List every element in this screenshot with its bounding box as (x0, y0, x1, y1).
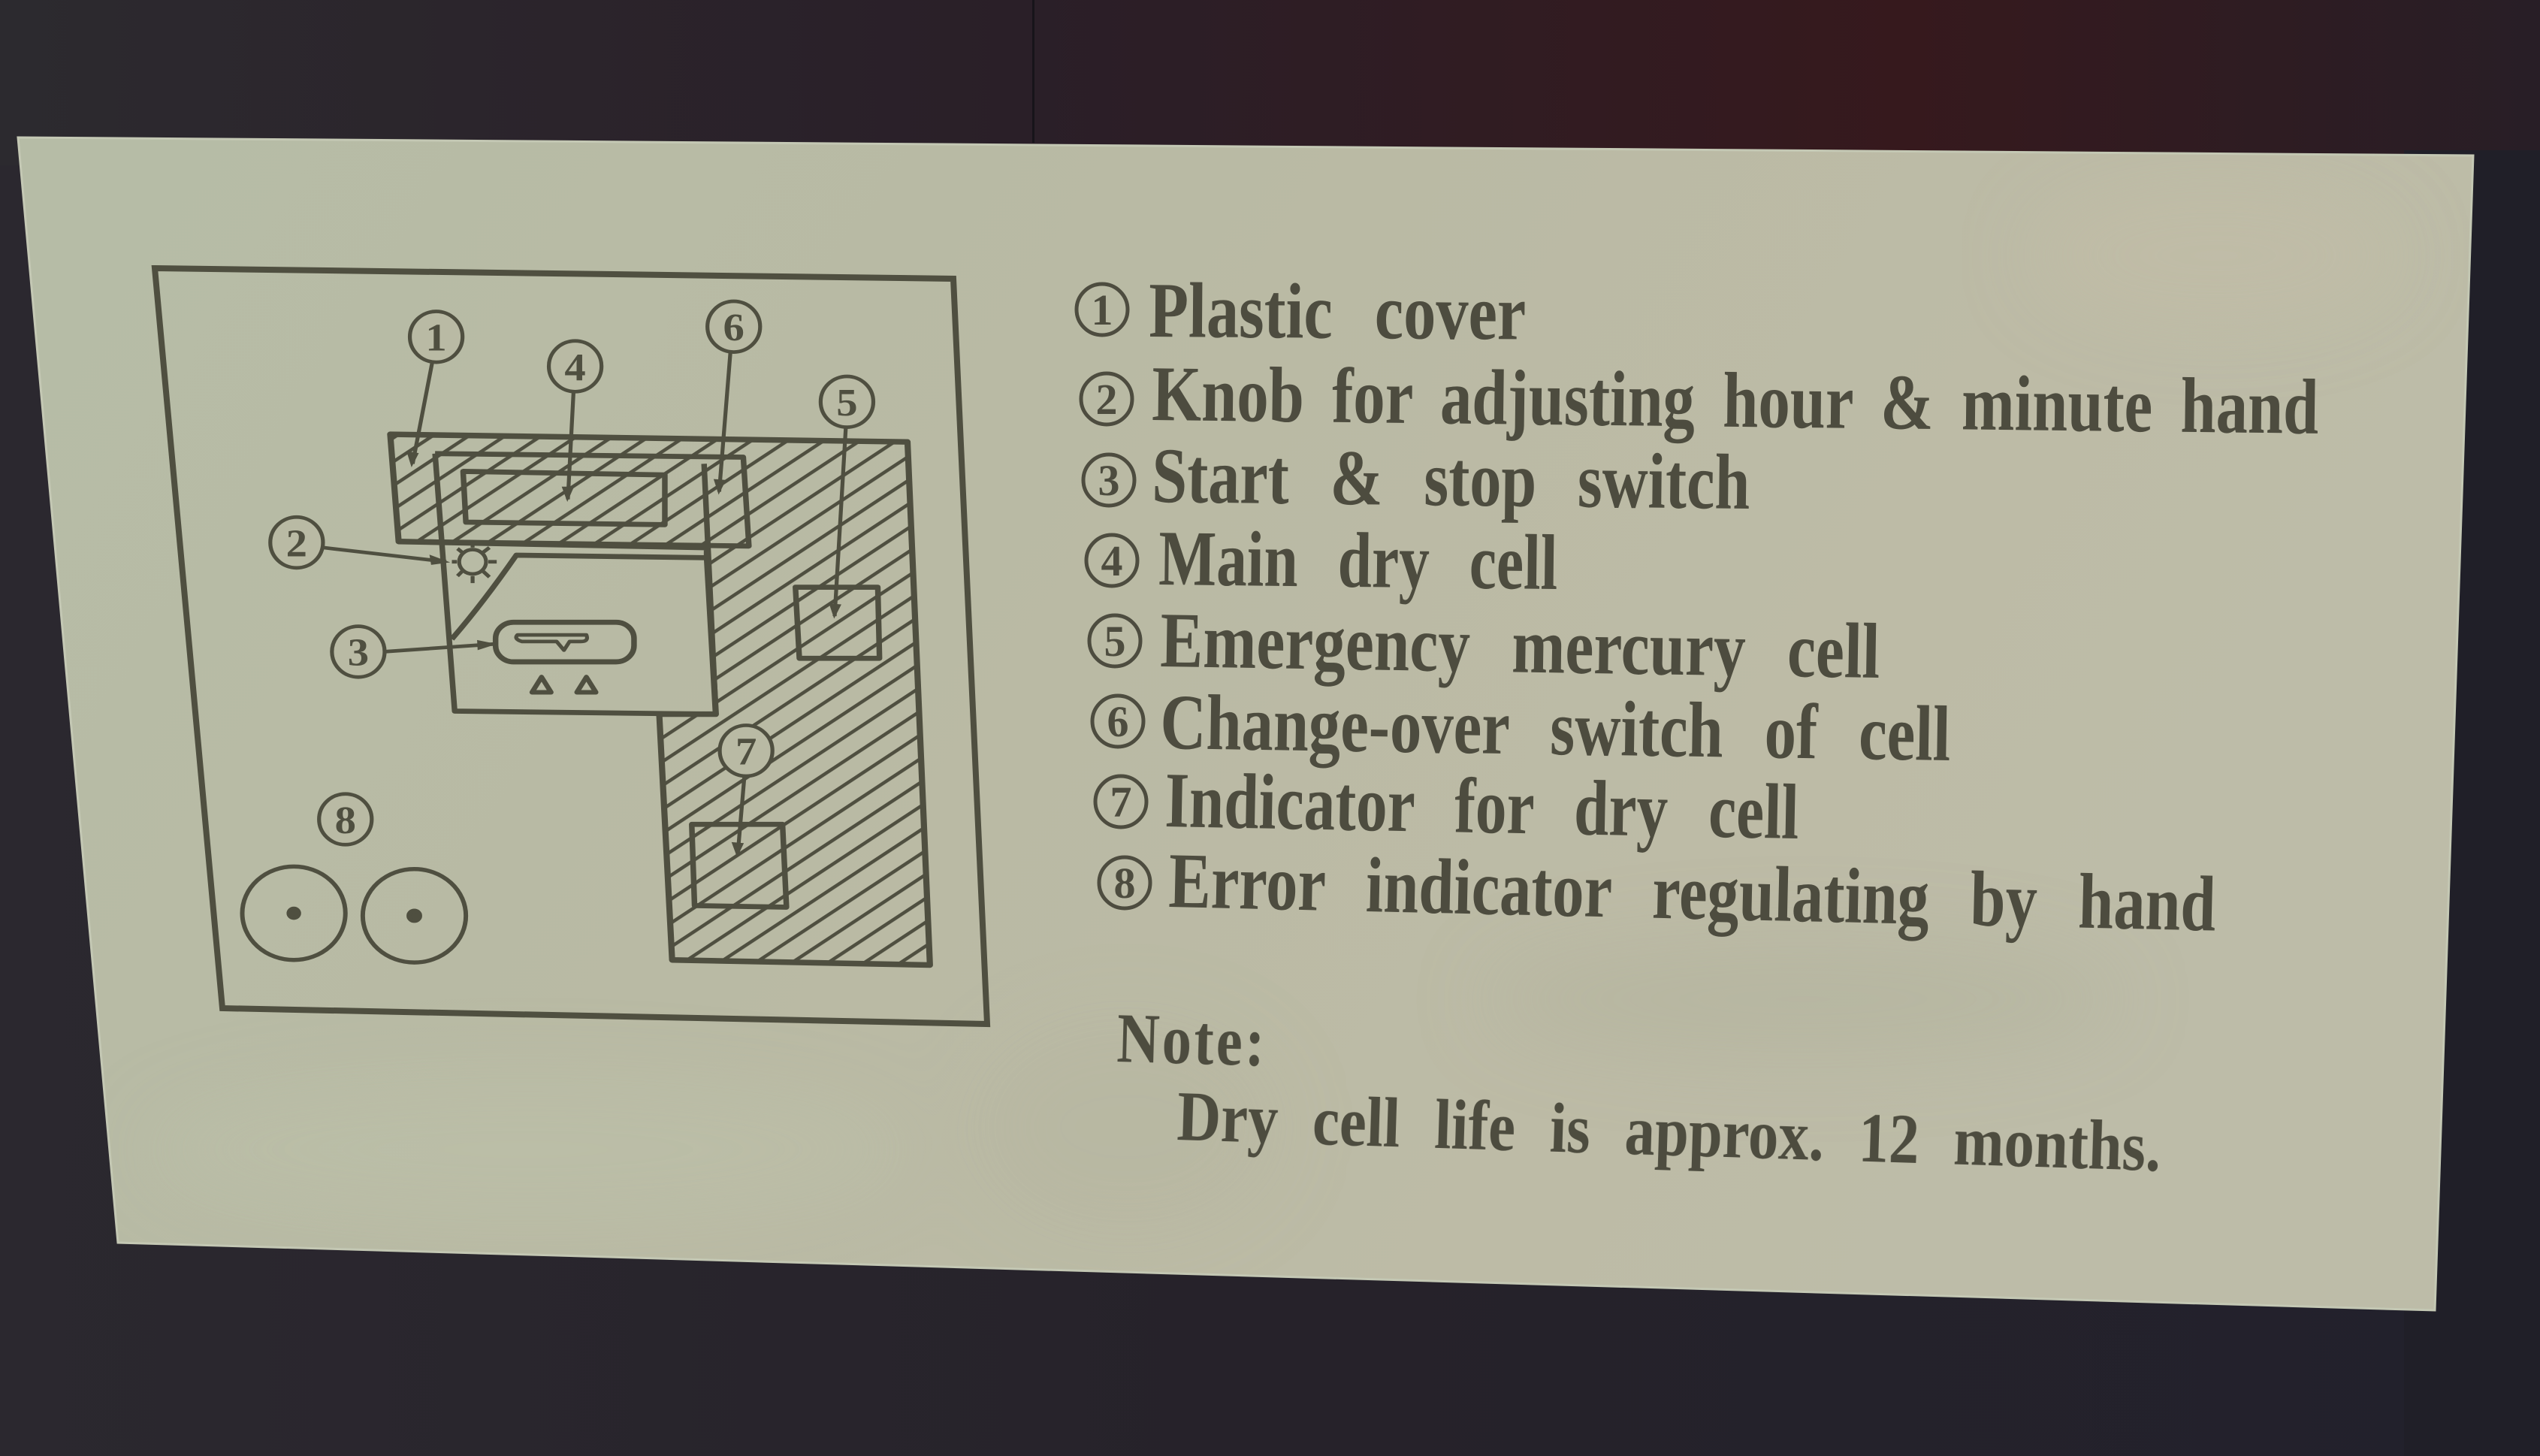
item 4: Main dry cell (1158, 514, 1558, 606)
note text: Dry cell life is approx. 12 months. (1176, 1077, 2162, 1186)
start stop switch (496, 622, 634, 662)
error indicator dials (242, 866, 466, 962)
clock schematic (242, 301, 930, 965)
item 8: Error indicator regulating by hand (1167, 836, 2217, 948)
switch panel (435, 454, 716, 714)
arrowheads (406, 451, 841, 857)
card (18, 137, 2473, 1310)
item 5: 5 (1104, 617, 1125, 666)
item 6: 6 (1107, 697, 1128, 746)
item 1: 1 (1091, 285, 1113, 334)
callout numbers: 8 (335, 799, 356, 841)
plastic cover frame (399, 454, 749, 546)
indicator box (692, 824, 787, 907)
callout numbers: 5 (836, 381, 858, 424)
item 5: Emergency mercury cell (1160, 596, 1880, 695)
item 3: 3 (1098, 456, 1119, 505)
callout numbers: 2 (286, 522, 307, 565)
item 7: 7 (1110, 778, 1131, 826)
leader lines (323, 352, 846, 855)
parts list (1077, 266, 2319, 948)
main dry cell box (463, 471, 665, 524)
item 2: 2 (1095, 375, 1118, 424)
item 1: Plastic cover (1149, 266, 1527, 357)
note heading: Note: (1116, 999, 1268, 1081)
callout numbers: 6 (723, 306, 744, 349)
diagram (155, 268, 987, 1024)
callout numbers: 7 (735, 730, 757, 773)
item 6: Change-over switch of cell (1160, 678, 1951, 778)
item 3: Start & stop switch (1152, 431, 1750, 526)
diagram frame (155, 268, 987, 1024)
indicator triangles (532, 677, 596, 693)
emergency cell box (796, 588, 880, 658)
item 7: Indicator for dry cell (1164, 756, 1800, 856)
item 4 (1086, 514, 1558, 606)
icon: knob sun (452, 542, 497, 583)
callout numbers: 4 (564, 346, 586, 388)
callout numbers: 3 (348, 631, 369, 674)
note (1116, 999, 2162, 1186)
callout circles (270, 301, 873, 844)
callout numbers (286, 306, 858, 841)
hatched body (390, 434, 930, 965)
item 8: 8 (1113, 859, 1136, 908)
callout numbers: 1 (425, 316, 447, 359)
item 4: 4 (1101, 536, 1122, 585)
